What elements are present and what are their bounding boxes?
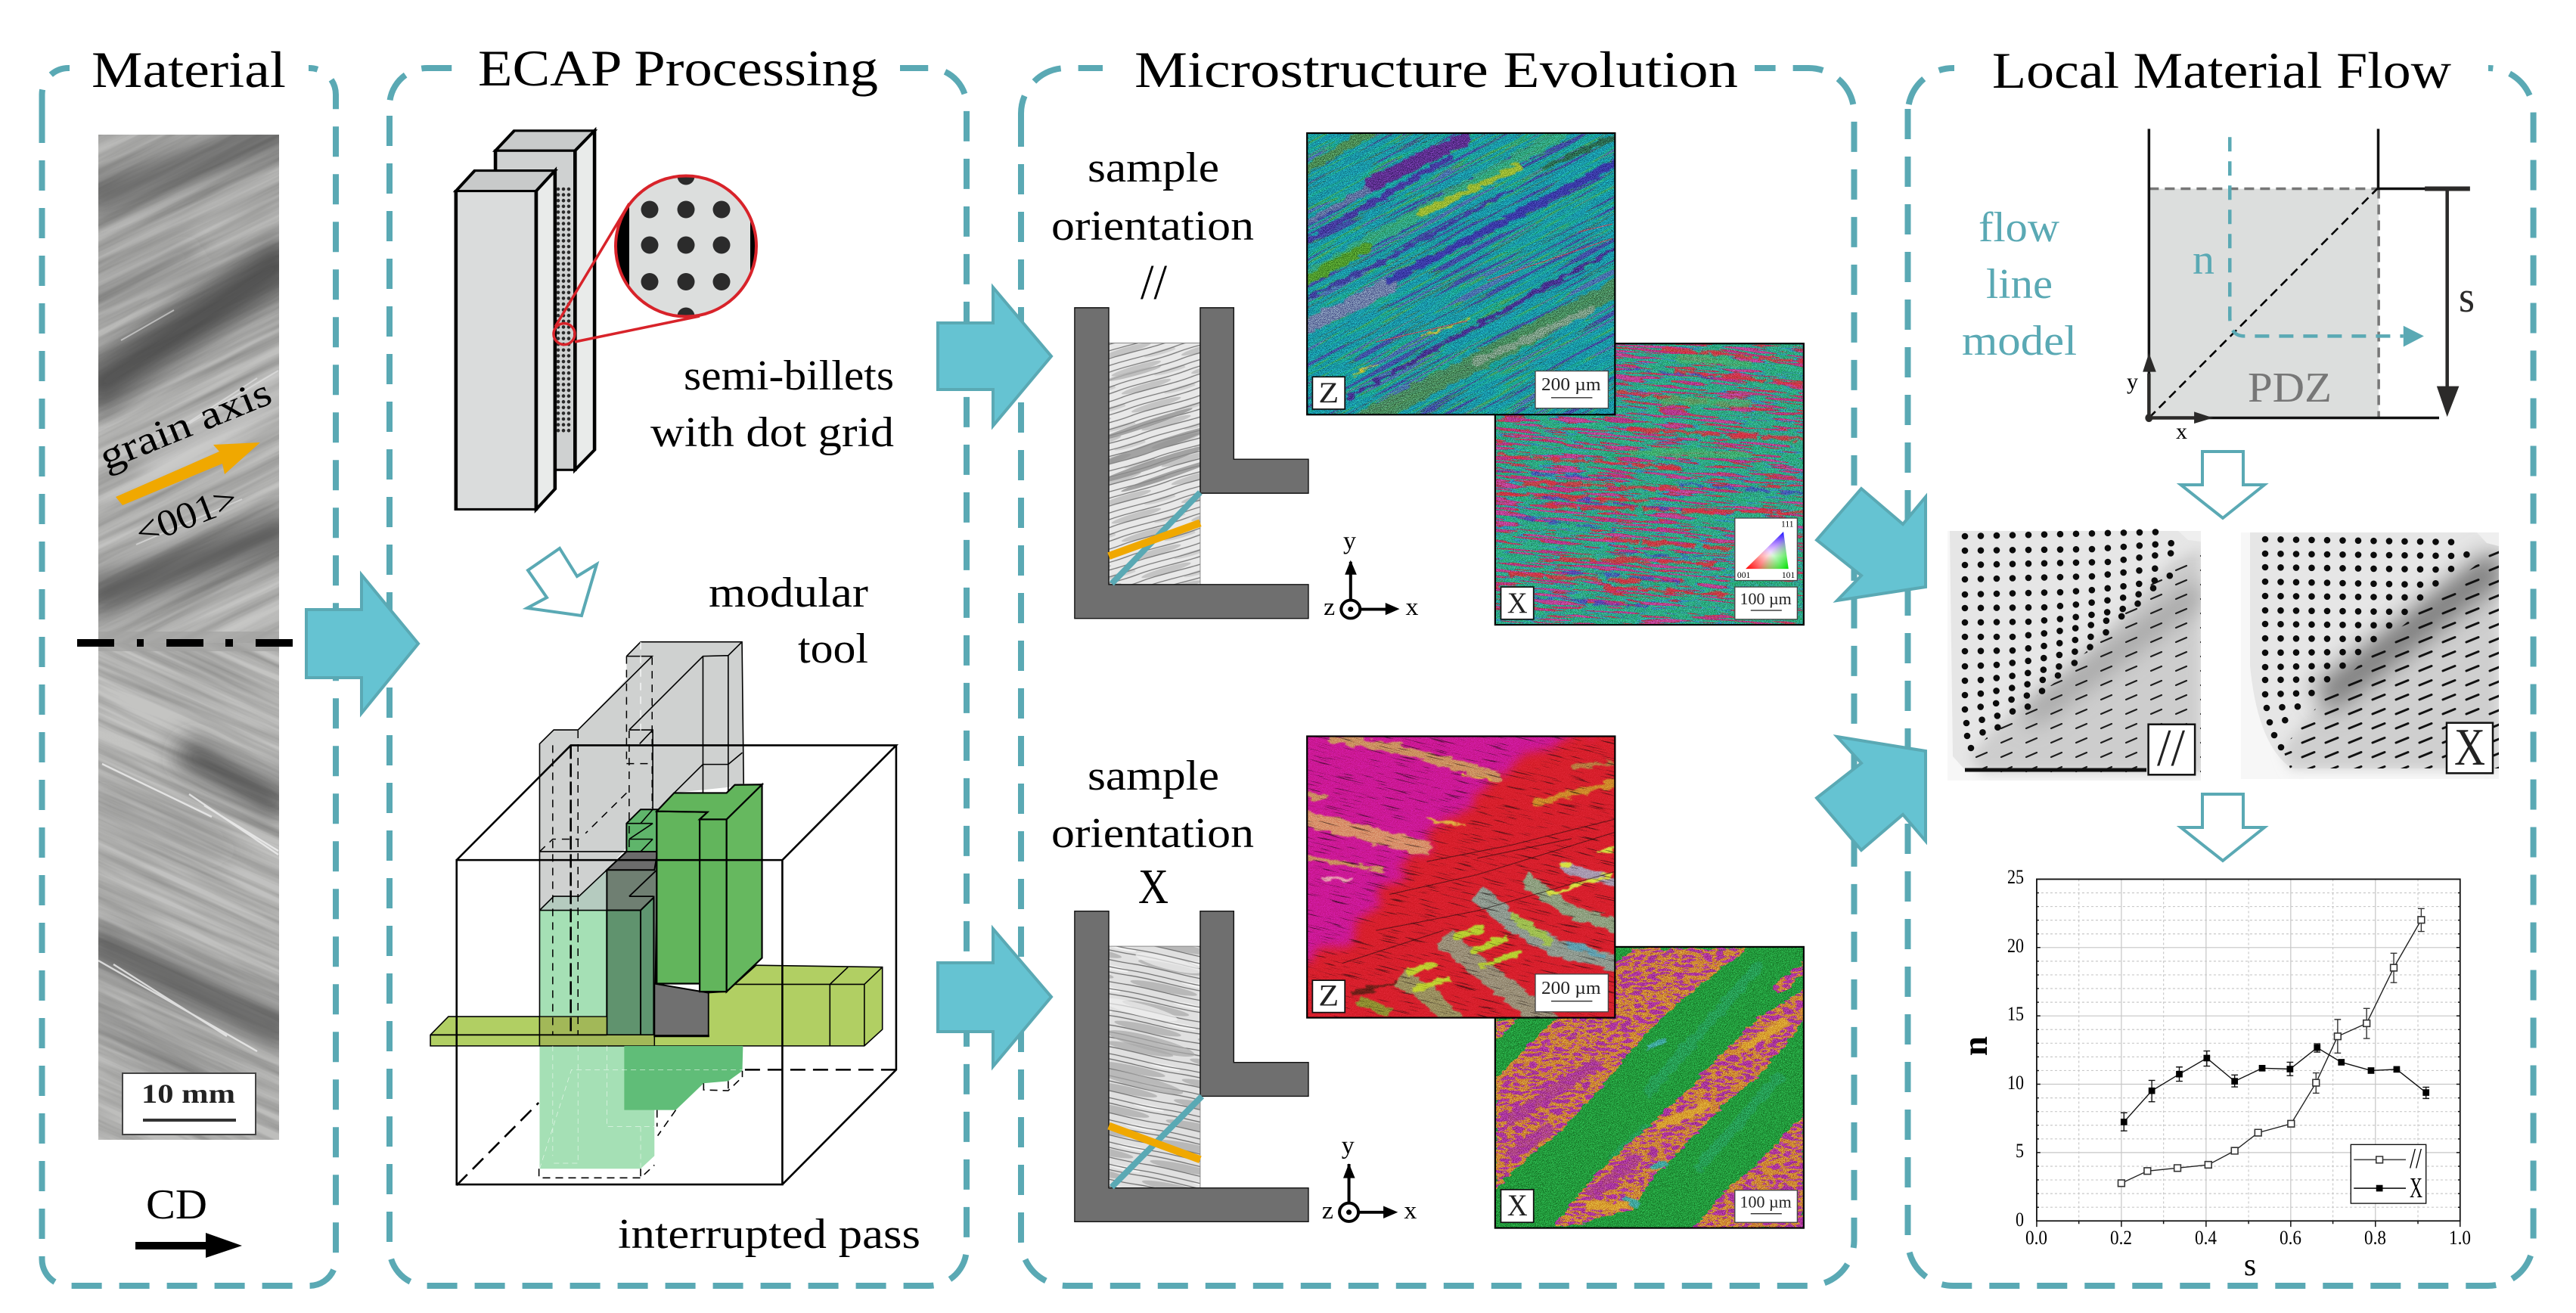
labels: flow line model: s (2459, 272, 2475, 321)
arrow: outline diagonal (527, 548, 597, 616)
label Z (1312, 979, 1345, 1013)
axes icon: xyz lower: x (1404, 1197, 1417, 1225)
text: modular tool (709, 570, 868, 672)
label: parallel: // (2157, 719, 2186, 778)
chart: n versus s (1956, 866, 2471, 1283)
heading: Microstructure Evolution: Microstructure Evolution (1134, 41, 1738, 98)
label: CD: CD (146, 1181, 207, 1228)
chart axis label s: s (2244, 1248, 2256, 1283)
text: interrupted pass: interrupted pass (618, 1211, 920, 1258)
legend: IPF triangle (1735, 518, 1797, 581)
axes icon: xyz upper: x (1406, 594, 1419, 621)
scale label 100 um: 100 µm (1740, 1193, 1792, 1212)
illustration: modular ECAP tool (430, 642, 896, 1185)
text: sample orientation parallel: // (1141, 255, 1168, 310)
chart tick labels: 0.4 (2195, 1227, 2217, 1249)
scale label 100 um: 100 µm (1740, 590, 1792, 608)
series: X (2121, 1044, 2429, 1131)
labels: flow line model: x (2176, 419, 2187, 444)
arrow: ECAP to Microstructure upper (938, 287, 1051, 426)
panel: ECAP Processing (390, 39, 967, 1286)
photo: dot grid X (2241, 532, 2499, 779)
diagram: ECAP channel parallel (1075, 308, 1308, 619)
scale bar 10 mm: 10 mm (141, 1079, 235, 1109)
heading: Local Material Flow: Local Material Flow (1992, 42, 2451, 99)
label X (1501, 1189, 1534, 1222)
label X (1501, 586, 1534, 619)
scale label 200 um (1535, 974, 1608, 1012)
photo: material sample (98, 135, 279, 1140)
text: flow line model: line (1986, 261, 2053, 308)
illustration: semi-billets (456, 131, 594, 509)
legend: IPF triangle: 111 (1781, 520, 1794, 529)
axes icon: xyz upper (1324, 527, 1419, 621)
text: semi-billets with dot grid (650, 352, 894, 456)
text: sample orientation X (1051, 753, 1254, 914)
EBSD map: Z lower (1306, 735, 1615, 1019)
legend: IPF triangle: 101 (1782, 571, 1795, 580)
legend box (2351, 1144, 2426, 1203)
chart tick labels: 0.6 (2280, 1227, 2301, 1249)
text: sample orientation parallel: orientation (1051, 203, 1254, 250)
chart tick labels: 5 (2016, 1140, 2024, 1162)
label Z: Z (1318, 979, 1339, 1012)
chart axis label n: n (1956, 1036, 1995, 1056)
chart legend labels: // (2410, 1143, 2422, 1175)
EBSD map: X upper (1446, 307, 1852, 661)
labels: flow line model: n (2193, 237, 2214, 284)
chart tick labels: 15 (2007, 1003, 2024, 1025)
axes icon: xyz upper: z (1324, 594, 1335, 621)
chart legend labels (2410, 1143, 2422, 1204)
EBSD map: Z upper (1306, 132, 1615, 416)
chart tick labels: 0.0 (2025, 1227, 2047, 1249)
legend: IPF triangle: 001 (1737, 571, 1750, 580)
label X: X (1507, 586, 1528, 619)
chart tick labels: 0.8 (2364, 1227, 2386, 1249)
heading: ECAP Processing: ECAP Processing (478, 39, 878, 97)
diagram: ECAP channel X (1075, 911, 1308, 1221)
arrow: grain axis orange (116, 442, 260, 505)
text: sample orientation X: X (1138, 859, 1169, 914)
scale label 200 um: 200 µm (1541, 375, 1601, 395)
arrow: ECAP to Microstructure lower (938, 929, 1051, 1066)
text: flow line model (1962, 204, 2077, 365)
EBSD map: X lower (1495, 947, 1804, 1229)
series: parallel (2118, 908, 2425, 1187)
label: grain axis: grain axis (93, 371, 278, 479)
text: sample orientation X: sample (1088, 753, 1219, 799)
heading: Material: Material (92, 41, 286, 98)
magnifier: dot grid detail (554, 168, 758, 345)
scale label 200 um (1535, 371, 1608, 408)
labels: flow line model (2127, 237, 2475, 444)
panel: Local Material Flow (1907, 42, 2534, 1286)
chart tick labels: 25 (2007, 866, 2024, 888)
arrow: Material to ECAP (306, 575, 418, 713)
chart tick labels: 0.2 (2110, 1227, 2132, 1249)
chart tick labels: 0 (2016, 1209, 2024, 1231)
text: sample orientation parallel (1051, 144, 1254, 310)
text: flow line model: flow (1979, 204, 2060, 251)
cut line (77, 639, 293, 647)
text: semi-billets with dot grid: with dot grid (650, 409, 894, 456)
chart legend labels: X (2410, 1172, 2422, 1204)
axes icon: xyz upper: y (1343, 527, 1356, 554)
text: semi-billets with dot grid: semi-billets (684, 352, 894, 399)
label X: X (1507, 1189, 1528, 1222)
labels: flow line model: y (2127, 369, 2138, 394)
label: 001 direction: <001> (129, 476, 244, 554)
diagram: flow line model (2143, 129, 2470, 424)
arrow: outline down lower (2181, 794, 2264, 861)
panel: Microstructure Evolution (1021, 0, 1854, 1286)
chart tick labels: 10 (2007, 1072, 2024, 1094)
photo: dot grid parallel (1948, 531, 2201, 781)
label Z: Z (1318, 376, 1339, 409)
label Z (1312, 376, 1345, 409)
scale label 100 um (1735, 587, 1797, 619)
panel: Material (0, 0, 641, 1313)
chart tick labels (2007, 866, 2471, 1249)
arrow: CD (135, 1233, 242, 1258)
axes icon: xyz lower: y (1342, 1132, 1355, 1159)
arrow: outline down upper (2181, 452, 2264, 518)
text: flow line model: model (1962, 318, 2077, 365)
text: modular tool: modular (709, 570, 868, 616)
arrow: Microstructure to Flow upper (1817, 489, 1926, 601)
chart tick labels: 1.0 (2449, 1227, 2471, 1249)
scale label 100 um (1735, 1190, 1797, 1222)
scale label 200 um: 200 µm (1541, 978, 1601, 998)
labels: flow line model: PDZ (2248, 365, 2332, 411)
label: X: X (2454, 719, 2485, 777)
axes icon: xyz lower: z (1322, 1197, 1333, 1225)
arrow: Microstructure to Flow lower (1817, 737, 1926, 850)
text: sample orientation parallel: sample (1088, 144, 1219, 191)
label: parallel (2149, 719, 2195, 778)
chart tick labels: 20 (2007, 935, 2024, 957)
scale bar 10 mm (123, 1073, 256, 1135)
text: modular tool: tool (798, 625, 868, 672)
axes icon: xyz lower (1322, 1132, 1417, 1225)
text: sample orientation X: orientation (1051, 810, 1254, 857)
